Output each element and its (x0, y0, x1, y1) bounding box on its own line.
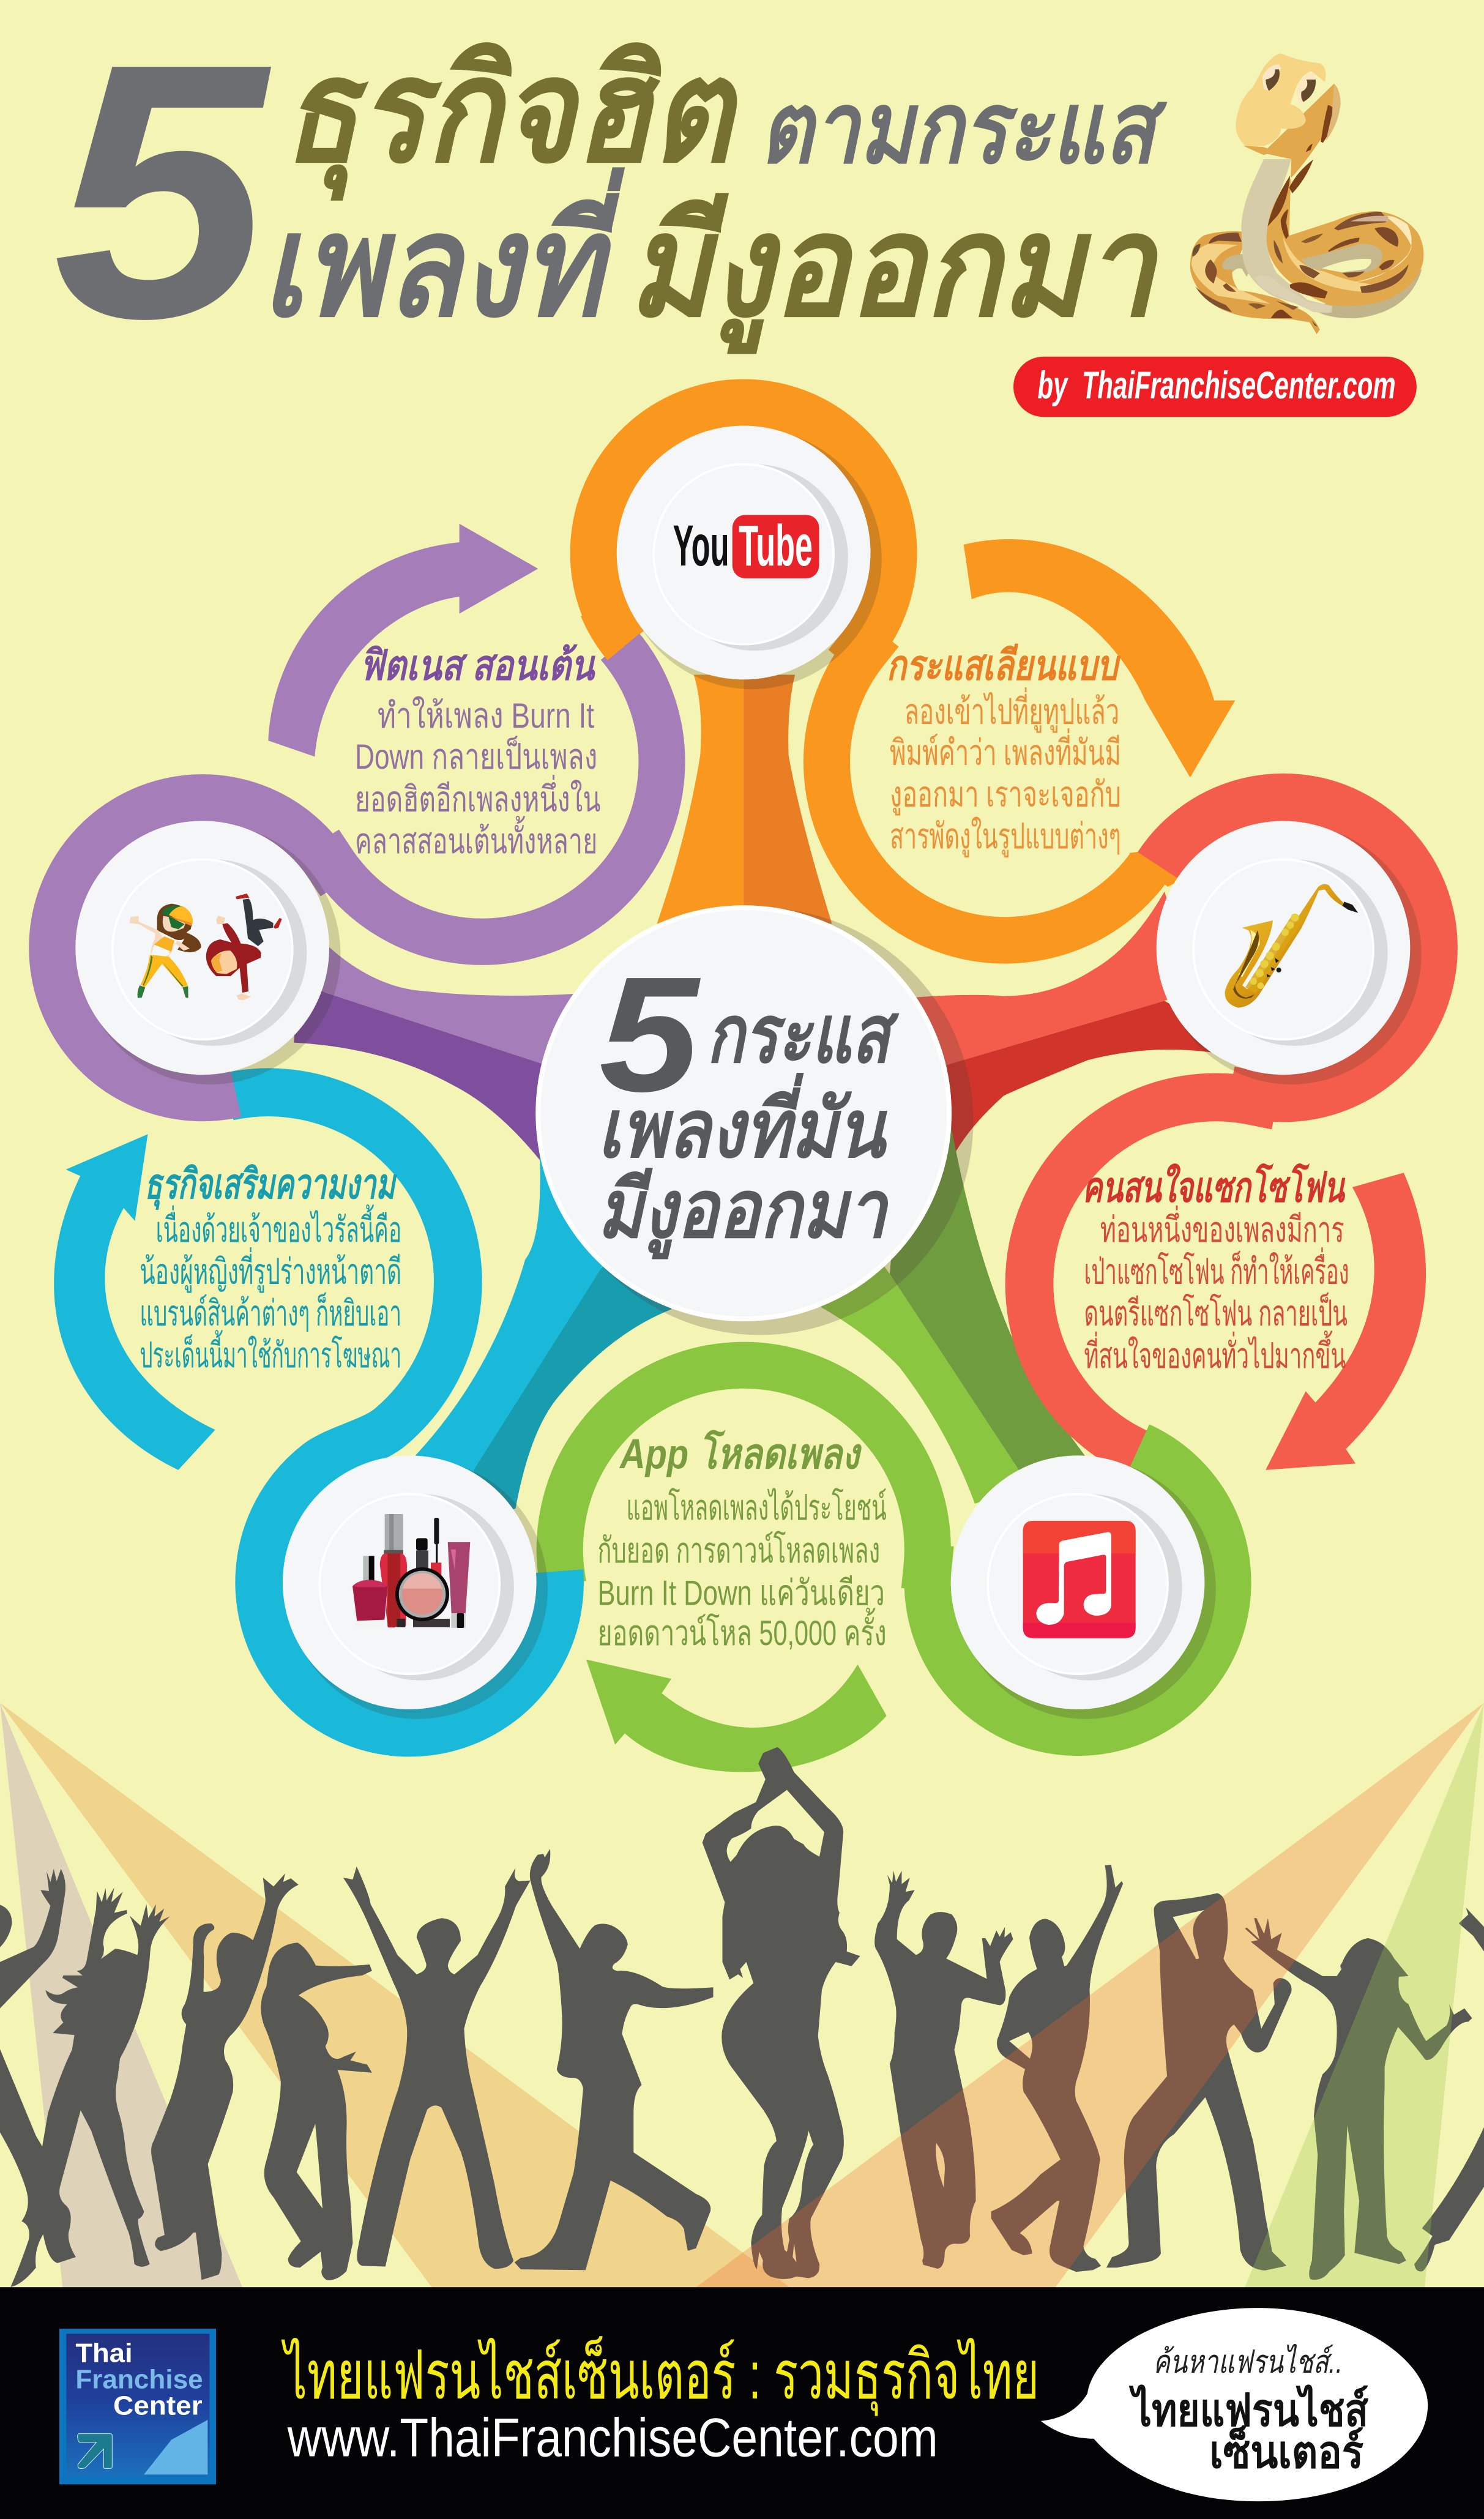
stem: purple (294, 936, 591, 1165)
ribbon: blue (228, 1092, 560, 1733)
panel text: beauty business: เนื่องด้วยเจ้าของไวรัลนี้คือ (156, 1204, 401, 1250)
panel text: imitation trend: งูออกมา เราจะเจอกับ (890, 775, 1121, 816)
speech bubble: ไทยแฟรนไชส์ (1128, 2384, 1368, 2436)
panel text: beauty business: ธุรกิจเสริมความงาม (144, 1161, 397, 1210)
panel text: saxophone (1083, 1162, 1349, 1376)
icon: dancers (130, 894, 282, 1000)
circle: music (951, 1455, 1216, 1719)
arrow: purple (268, 524, 538, 756)
central title: มีงูออกมา (597, 1164, 889, 1260)
panel text: imitation trend (887, 642, 1121, 857)
logo: Thai Franchise Center: Center (113, 2391, 203, 2421)
icon: YouTube logo: Tube (739, 513, 813, 578)
central title (597, 942, 899, 1260)
spotlights right (695, 1703, 1484, 2288)
panel text: imitation trend: ลองเข้าไปที่ยูทูปแล้ว (904, 688, 1119, 733)
speech bubble: เซ็นเตอร์ (1209, 2425, 1363, 2477)
logo: Thai Franchise Center: Thai (75, 2338, 133, 2368)
icon: YouTube logo: You (673, 513, 729, 578)
ribbon: red (1029, 797, 1433, 1458)
panel text: beauty business: แบรนด์สินค้าต่างๆ ก็หยิบเอา (140, 1293, 401, 1334)
central title: กระแส (707, 989, 899, 1079)
title: มีงูออกมา (628, 187, 1159, 354)
central title: เพลงที่มัน (597, 1073, 888, 1174)
ribbon: orange (594, 403, 1180, 940)
title: ธุรกิจฮิต (283, 30, 739, 201)
footer slogan: ไทยแฟรนไชส์เซ็นเตอร์ : รวมธุรกิจไทย (281, 2335, 1039, 2416)
footer slogan (281, 2335, 1039, 2468)
panel text: app download: แอพโหลดเพลงได้ประโยชน์ (627, 1487, 887, 1528)
byline pill (1013, 357, 1417, 417)
logo: Thai Franchise Center (59, 2329, 216, 2484)
panel text: fitness: ทำให้เพลง Burn It (378, 696, 594, 736)
speech bubble (1041, 2308, 1428, 2501)
title: ตามกระแส (759, 73, 1167, 184)
circle: saxophone (1157, 821, 1422, 1084)
panel text: fitness (355, 642, 601, 861)
arrow: green (586, 1660, 887, 1772)
panel text: fitness: คลาสสอนเต้นทั้งหลาย (355, 816, 597, 861)
stem: blue (401, 1154, 671, 1518)
arrow: red (1266, 1173, 1426, 1470)
panel text: beauty business: น้องผู้หญิงที่รูปร่างหน้าตาดี (140, 1247, 401, 1293)
circle: cosmetics (283, 1455, 548, 1719)
panel text: app download: กับยอด การดาวน์โหลดเพลง (597, 1530, 880, 1570)
panel text: beauty business: ประเด็นนี้มาใช้กับการโฆษณา (140, 1330, 401, 1375)
ribbon: green (560, 1365, 1228, 1733)
circle: dancers (75, 821, 340, 1084)
panel text: fitness: Down กลายเป็นเพลง (355, 736, 597, 777)
stem: orange (657, 674, 832, 924)
icon: snake (1190, 53, 1423, 334)
panel text: fitness: ฟิตเนส สอนเต้น (360, 642, 595, 689)
panel text: app download: App โหลดเพลง (619, 1429, 862, 1477)
silhouettes: right dancers (703, 1747, 1484, 2280)
panel text: app download (597, 1429, 887, 1653)
title (53, 0, 1167, 394)
panel text: fitness: ยอดฮิตอีกเพลงหนึ่งใน (355, 775, 601, 819)
stem: red (892, 892, 1229, 1160)
central circle (538, 908, 973, 1335)
panel text: imitation trend: กระแสเลียนแบบ (887, 642, 1121, 689)
icon: cosmetics (352, 1514, 470, 1628)
spotlights left (0, 1703, 790, 2288)
infographic wheel (52, 0, 1433, 1772)
ribbon: orange overlap (602, 607, 625, 645)
title: เพลงที่ (262, 166, 625, 345)
silhouettes: left dancers (0, 1849, 713, 2287)
logo: Thai Franchise Center: Franchise (75, 2365, 203, 2395)
circle: YouTube (617, 426, 882, 689)
panel text: imitation trend: พิมพ์คำว่า เพลงที่มันมี (890, 728, 1121, 773)
panel text: beauty business (140, 1161, 401, 1375)
speech bubble: ค้นหาแฟรนไชส์.. (1153, 2343, 1343, 2380)
panel text: saxophone: ท่อนหนึ่งของเพลงมีการ (1100, 1206, 1344, 1250)
ribbon: purple (52, 644, 662, 1098)
stem: green (819, 1125, 1092, 1504)
panel text: app download: ยอดดาวน์โหล 50,000 ครั้ง (597, 1608, 887, 1653)
icon: saxophone (1225, 884, 1358, 1008)
panel text: app download: Burn It Down แค่วันเดียว (597, 1573, 885, 1613)
arrow: orange (964, 539, 1235, 777)
panel text: saxophone: คนสนใจแซกโซโฟน (1083, 1162, 1345, 1211)
panel text: imitation trend: สารพัดงูในรูปแบบต่างๆ (890, 816, 1121, 857)
footer slogan: www.ThaiFranchiseCenter.com (287, 2407, 938, 2468)
central title: 5 (599, 942, 703, 1125)
footer (0, 2287, 1484, 2519)
arrow: blue (54, 1134, 215, 1470)
icon: music note (1023, 1521, 1136, 1638)
